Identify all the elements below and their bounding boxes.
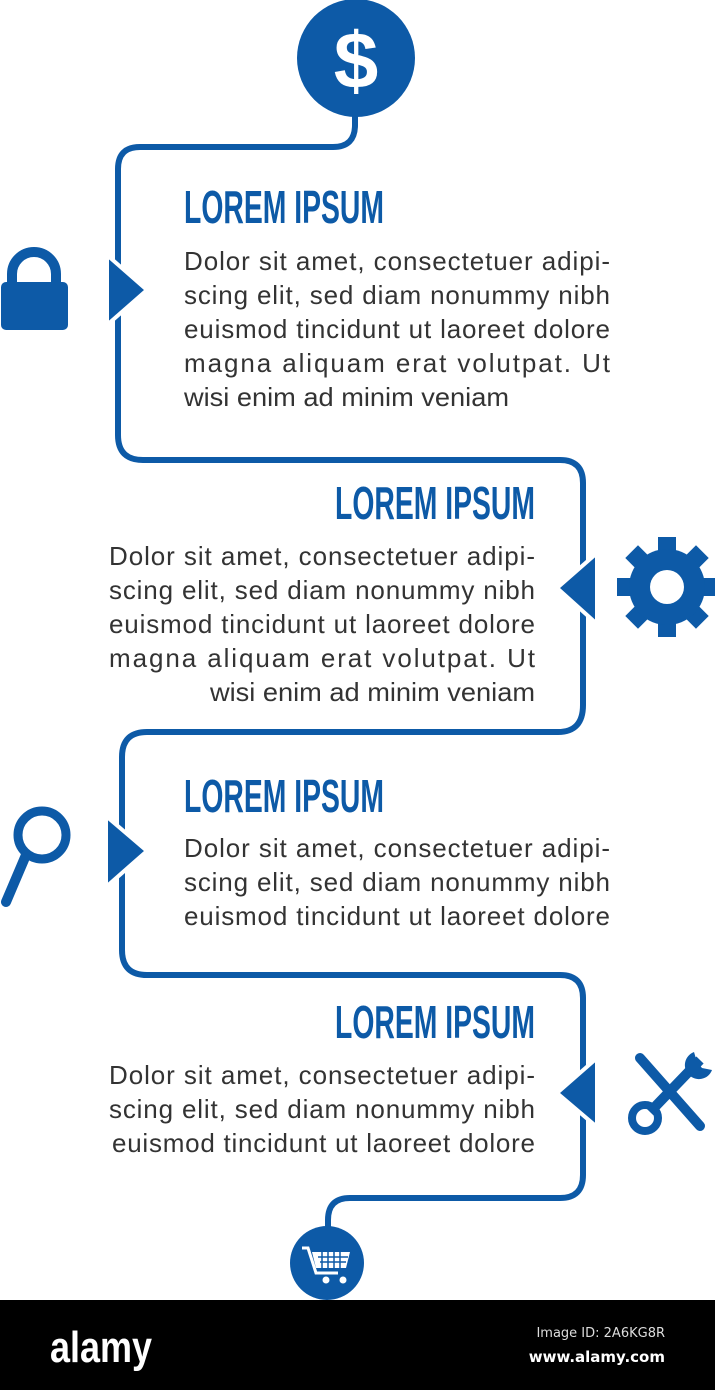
text block 2: scing elit, sed diam nonummy nibh [109,575,535,605]
icon: dollar circle: $ [334,16,378,105]
text block 3: scing elit, sed diam nonummy nibh [184,867,610,897]
icon: lock [1,252,68,330]
heading 2: LOREM IPSUM [335,477,535,529]
text block 4: scing elit, sed diam nonummy nibh [109,1094,535,1124]
text block 1 [183,246,611,412]
heading 4: LOREM IPSUM [335,996,535,1048]
icon: cart circle [290,1226,364,1300]
text block 3: euismod tincidunt ut laoreet dolore [184,901,610,931]
connector path [118,110,583,1235]
text block 4: Dolor sit amet, consectetuer adipi- [109,1060,535,1090]
text block 2: magna aliquam erat volutpat. Ut [109,643,536,673]
icon: tools [632,1052,712,1131]
icon: dollar circle [297,0,415,117]
heading 3: LOREM IPSUM [184,770,384,822]
icon: gear [617,537,715,637]
icon: magnifier [6,811,66,902]
text block 3 [184,833,610,931]
text block 3: Dolor sit amet, consectetuer adipi- [184,833,610,863]
text block 1: Dolor sit amet, consectetuer adipi- [184,246,610,276]
text block 1: euismod tincidunt ut laoreet dolore [184,314,610,344]
heading 1: LOREM IPSUM [184,181,384,233]
arrow: triangle 3 [106,816,147,887]
footer bar: alamy [50,1323,152,1372]
footer bar: Image ID: 2A6KG8R [536,1326,665,1341]
arrow: triangle 1 [107,255,147,325]
text block 4 [109,1060,535,1158]
text block 1: magna aliquam erat volutpat. Ut [184,348,611,378]
arrow: triangle 2 [557,553,597,624]
arrow: triangle 4 [557,1058,597,1127]
text block 1: scing elit, sed diam nonummy nibh [184,280,610,310]
text block 2 [109,541,536,707]
text block 1: wisi enim ad minim veniam [183,382,509,412]
text block 2: wisi enim ad minim veniam [209,677,535,707]
text block 4: euismod tincidunt ut laoreet dolore [112,1128,535,1158]
footer bar: www.alamy.com [529,1348,665,1366]
text block 2: euismod tincidunt ut laoreet dolore [109,609,535,639]
footer bar [0,1300,715,1390]
text block 2: Dolor sit amet, consectetuer adipi- [109,541,535,571]
